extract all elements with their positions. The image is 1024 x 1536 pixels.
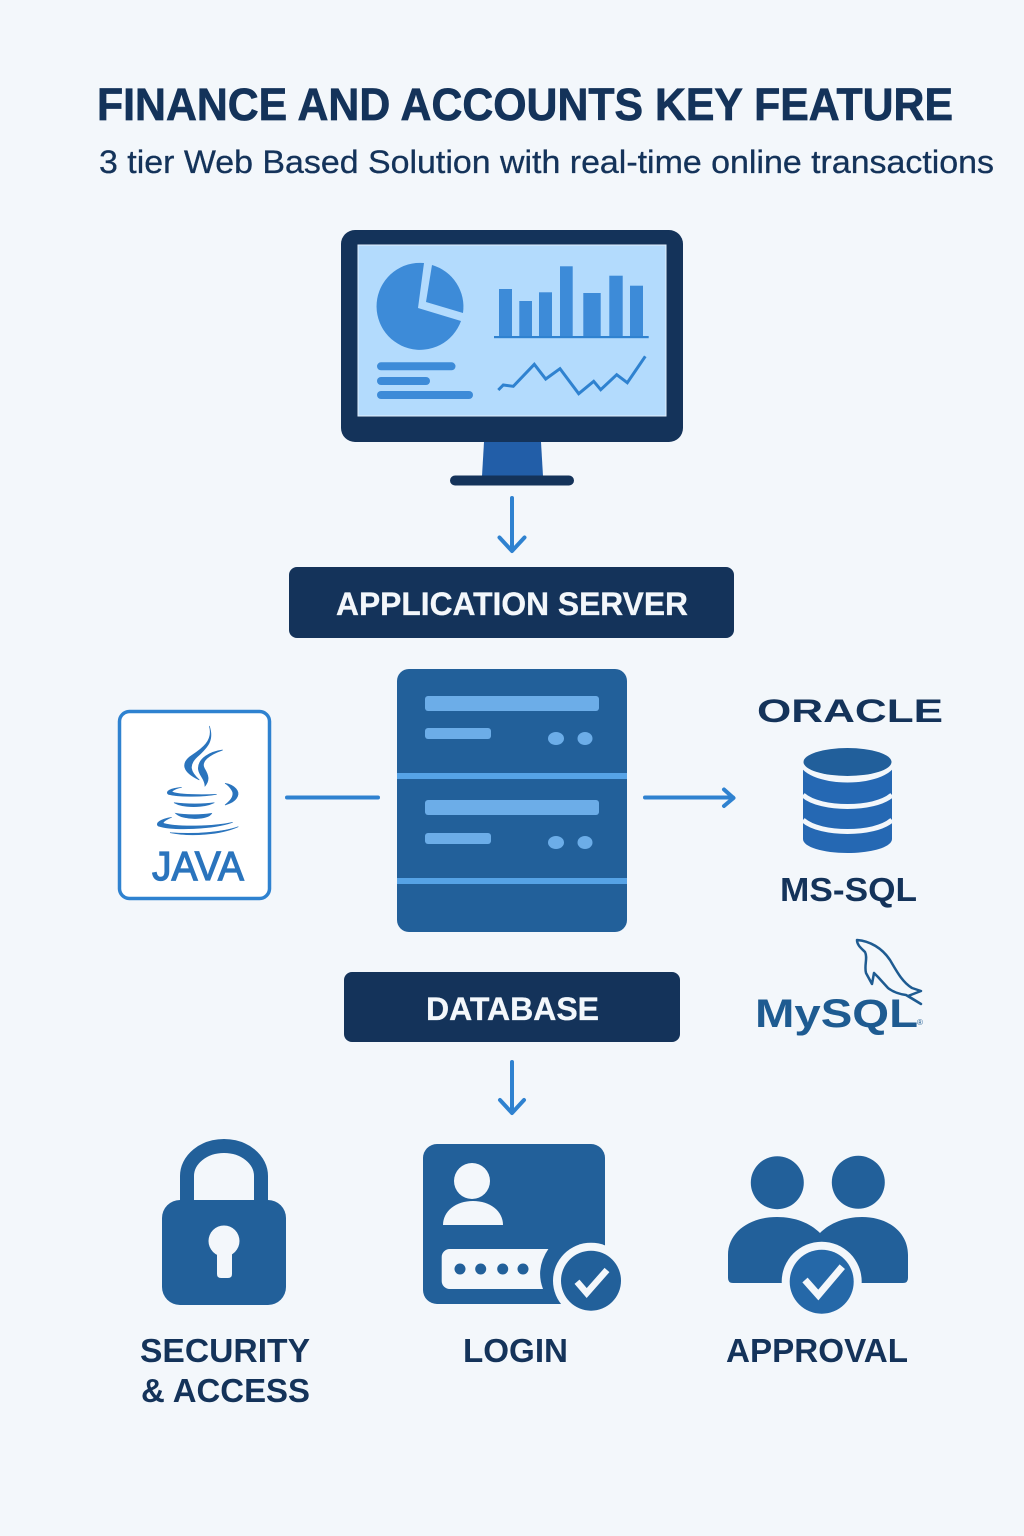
mysql logo: ®	[917, 1018, 923, 1027]
icon: java cup	[157, 726, 238, 835]
text lines	[377, 362, 473, 399]
label: approval: APPROVAL	[726, 1332, 908, 1369]
icon: approval users	[728, 1156, 908, 1322]
icon: padlock	[162, 1146, 286, 1305]
icon: database cylinder	[800, 742, 896, 853]
card: java logo	[120, 712, 270, 898]
label: login: LOGIN	[463, 1332, 568, 1369]
pie chart	[377, 263, 463, 350]
line chart	[498, 356, 645, 394]
icon: login card	[423, 1144, 629, 1319]
database label: DATABASE	[426, 991, 599, 1027]
arrow: database to features	[500, 1062, 524, 1113]
mysql logo	[755, 940, 923, 1036]
ms-sql label: MS-SQL	[780, 871, 917, 908]
database label	[344, 972, 680, 1042]
oracle logo text: ORACLE	[757, 693, 943, 729]
label: security and access	[140, 1332, 310, 1409]
arrow: monitor to application server	[500, 498, 524, 551]
bar chart	[494, 266, 649, 338]
connector: java to server	[287, 796, 378, 800]
arrow: server to databases	[645, 790, 734, 806]
subtitle: 3 tier Web Based Solution with real-time online transactions	[99, 144, 994, 180]
icon: server rack	[397, 669, 627, 932]
application server label: APPLICATION SERVER	[336, 586, 688, 622]
java text: JAVA	[152, 843, 245, 889]
title: FINANCE AND ACCOUNTS KEY FEATURE	[97, 79, 953, 130]
application server label	[289, 567, 734, 638]
icon: monitor dashboard	[341, 230, 683, 486]
icon: dolphin	[857, 940, 921, 1004]
label: security and access: & ACCESS	[141, 1372, 310, 1409]
mysql logo: MySQL	[755, 992, 918, 1036]
label: security and access: SECURITY	[140, 1332, 310, 1369]
